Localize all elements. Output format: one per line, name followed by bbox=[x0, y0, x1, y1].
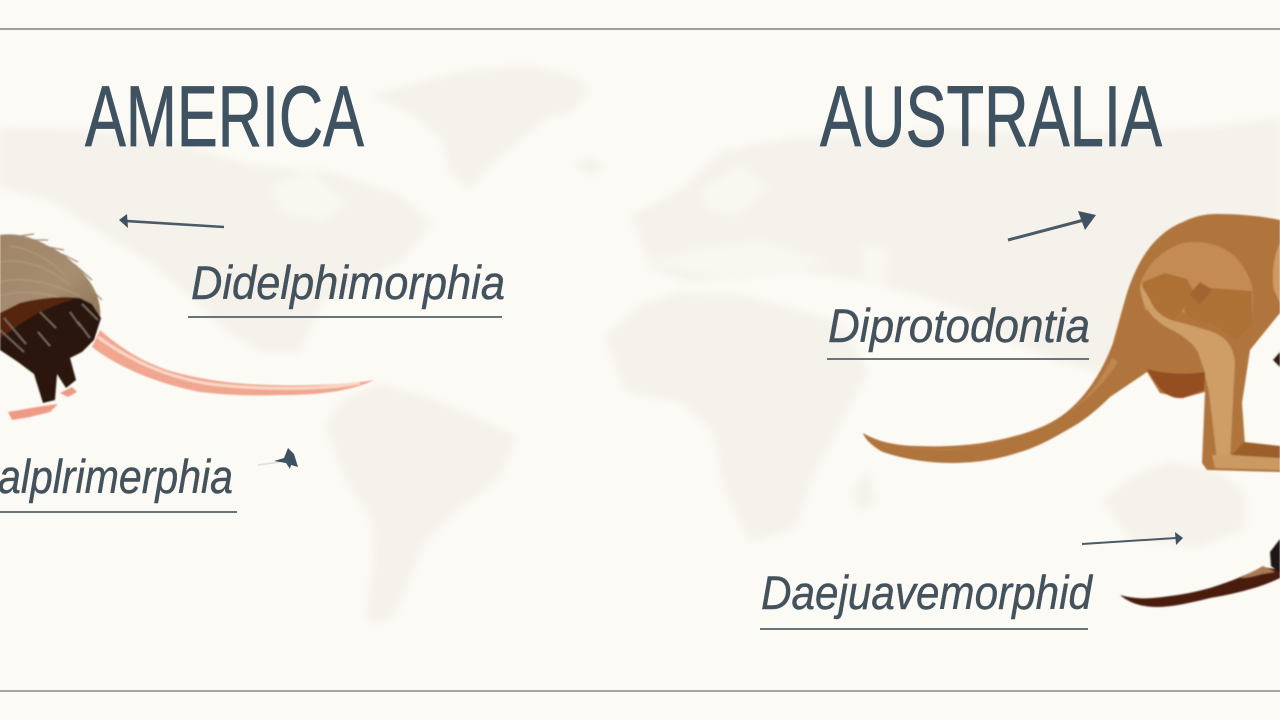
arrow: America top, pointing left bbox=[119, 214, 224, 228]
arrow: Australia top, pointing right bbox=[1008, 211, 1096, 240]
kangaroo foot shadow bbox=[1232, 442, 1280, 458]
kangaroo body and tail silhouette bbox=[863, 214, 1280, 472]
opossum tail bbox=[92, 330, 374, 395]
kangaroo pale band and leg bbox=[1140, 285, 1235, 460]
kangaroo dark accent bbox=[1273, 352, 1280, 367]
heading: America: AMERICA bbox=[85, 69, 364, 165]
kangaroo thigh dark patches bbox=[1143, 273, 1252, 340]
kangaroo belly highlight bbox=[1273, 243, 1280, 303]
top rule bbox=[0, 28, 1280, 30]
arrow: America lower, pointing right bbox=[258, 448, 298, 469]
kangaroo tail highlight bbox=[900, 358, 1118, 450]
label: Didelphimorphia lower, cropped: alplrimerphia bbox=[0, 450, 233, 503]
opossum body fur bbox=[0, 234, 100, 320]
dasyurid tail pale edge bbox=[1240, 566, 1275, 578]
kangaroo foot highlight bbox=[1212, 455, 1280, 470]
opossum dark lower fur bbox=[0, 297, 101, 403]
illustration: kangaroo, cropped at right edge bbox=[863, 214, 1280, 472]
opossum fur hairs bbox=[20, 234, 102, 300]
opossum fur streaks bbox=[0, 246, 80, 298]
opossum guard hairs bbox=[0, 304, 98, 352]
kangaroo pouch bbox=[1147, 369, 1205, 398]
label: Dasyuromorphia: Daejuavemorphid bbox=[761, 566, 1094, 619]
opossum tail highlight bbox=[98, 337, 360, 388]
label: Diprotodontia: Diprotodontia bbox=[828, 299, 1090, 352]
illustration: opossum, cropped at left edge bbox=[0, 234, 374, 420]
label: Didelphimorphia upper: Didelphimorphia bbox=[191, 256, 505, 309]
dasyurid tail shape bbox=[1120, 567, 1280, 607]
map lakes and coastline gaps bbox=[270, 165, 890, 285]
dasyurid body bbox=[1270, 539, 1280, 573]
illustration: dasyurid tail, cropped at right edge bbox=[1120, 539, 1280, 607]
kangaroo thigh patch accent bbox=[1190, 282, 1212, 304]
opossum feet bbox=[8, 387, 77, 420]
world map backdrop bbox=[0, 66, 1280, 622]
bottom rule bbox=[0, 690, 1280, 692]
kangaroo thigh light dome bbox=[1140, 242, 1253, 322]
arrow: Australia lower, pointing right bbox=[1082, 532, 1183, 545]
opossum rust shoulder fur bbox=[0, 298, 74, 338]
